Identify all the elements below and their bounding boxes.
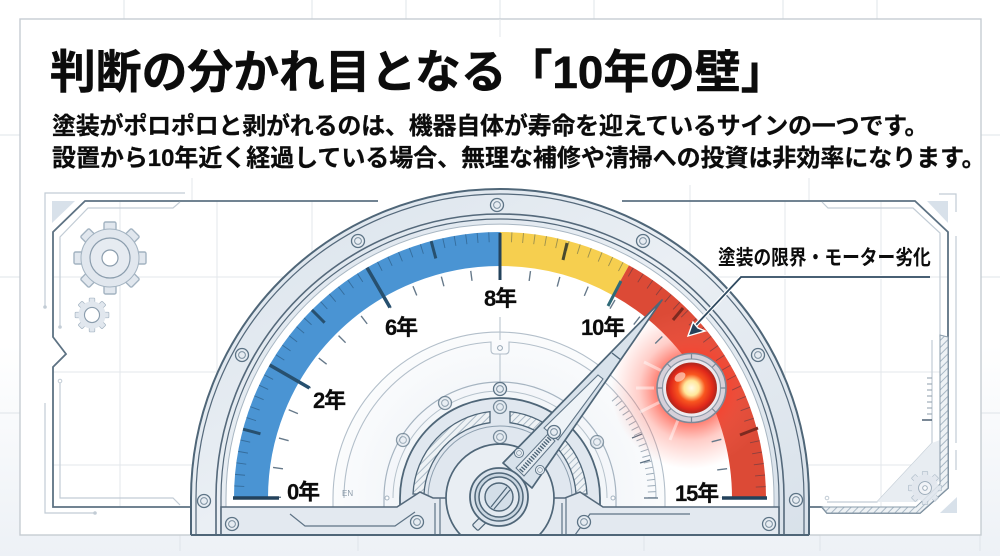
gauge housing (191, 189, 809, 535)
base plate (221, 492, 779, 535)
callout: 塗装の限界・モーター劣化 (718, 246, 931, 270)
housing screws (198, 198, 802, 508)
hub housing (445, 443, 555, 534)
major ticks (233, 233, 767, 498)
label: 0 years: 0年 (287, 480, 320, 504)
label: 6 years: 6年 (385, 315, 418, 340)
tech frame (43, 193, 957, 515)
lamp glow (616, 324, 751, 464)
icon: corner gear (908, 471, 942, 505)
gauge (191, 189, 809, 552)
scale ticks (239, 237, 761, 498)
label: 10 years: 10年 (581, 315, 625, 340)
label: 8 years: 8年 (484, 286, 517, 311)
band: red zone 10 to 15 years (621, 280, 749, 498)
colored scale band (251, 249, 749, 498)
callout (688, 246, 931, 336)
inner dial: EN (342, 489, 353, 498)
hatched inner ring (400, 398, 600, 507)
label: 15 years: 15年 (675, 481, 719, 506)
needle (503, 300, 662, 488)
scale labels (287, 286, 719, 506)
title: 判断の分かれ目となる「10年の壁」 (50, 47, 787, 98)
icon: large gear (74, 222, 146, 294)
description text: 設置から10年近く経過している場合、無理な補修や清掃への投資は非効率になります。 (52, 145, 986, 172)
gauge face (226, 224, 774, 507)
band: yellow zone 8 to 10 years (500, 249, 621, 280)
description text (52, 112, 986, 172)
base line (191, 534, 809, 536)
icon: small gear (75, 298, 109, 332)
warning lamp (657, 354, 726, 422)
description text: 塗装がポロポロと剥がれるのは、機器自体が寿命を迎えているサインの一つです。 (52, 112, 928, 140)
band: blue zone 0 to 8 years (251, 249, 500, 498)
label: 2 years: 2年 (313, 388, 346, 413)
inner dial (333, 317, 665, 507)
needle hub (470, 468, 528, 531)
